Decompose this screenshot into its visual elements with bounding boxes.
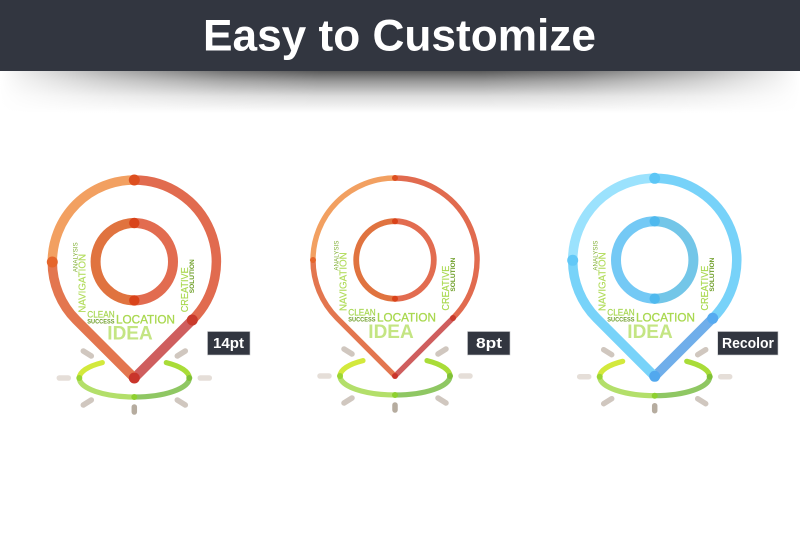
word cloud: SUCCESS — [87, 319, 114, 325]
badge: 8pt — [468, 332, 510, 355]
word cloud: LOCATION — [377, 312, 436, 325]
word cloud — [593, 241, 716, 343]
word cloud: LOCATION — [636, 312, 695, 325]
badge: 14pt: 14pt — [213, 336, 244, 352]
word cloud: SOLUTION — [710, 258, 716, 292]
ground ring — [337, 361, 453, 398]
pin outline — [310, 175, 477, 379]
badge: Recolor: Recolor — [722, 336, 774, 352]
pin: 8pt orange — [310, 175, 477, 410]
word cloud — [73, 242, 196, 345]
word cloud: IDEA — [627, 321, 673, 343]
header shadow — [0, 71, 800, 113]
ground ring — [76, 363, 192, 400]
word cloud: CLEAN — [607, 308, 635, 318]
word cloud — [334, 241, 457, 343]
word cloud: ANALYSIS — [593, 241, 599, 271]
title: Easy to Customize — [203, 12, 596, 60]
word cloud: NAVIGATION — [78, 254, 88, 313]
word cloud: SUCCESS — [607, 318, 634, 324]
word cloud: NAVIGATION — [338, 252, 350, 311]
word cloud: IDEA — [368, 321, 414, 343]
word cloud: SUCCESS — [348, 318, 376, 324]
header bar — [0, 0, 800, 71]
light rays — [580, 350, 730, 411]
inner ring — [616, 216, 693, 304]
word cloud: CLEAN — [348, 308, 376, 318]
word cloud: SOLUTION — [451, 258, 457, 292]
light rays — [59, 351, 209, 412]
pin outline — [567, 173, 737, 382]
word cloud: LOCATION — [116, 313, 175, 326]
word cloud: IDEA — [107, 323, 153, 345]
inner ring — [356, 218, 434, 302]
word cloud: CLEAN — [87, 309, 115, 319]
pin outline — [47, 174, 216, 384]
inner ring — [96, 218, 173, 306]
word cloud: CREATIVE — [440, 266, 452, 311]
badge: Recolor — [718, 332, 778, 355]
badge: 8pt: 8pt — [476, 336, 502, 352]
ground ring — [597, 361, 713, 399]
pin: 14pt orange — [47, 174, 216, 412]
word cloud: CREATIVE — [179, 267, 191, 312]
pin: recolored blue — [567, 173, 737, 411]
badge: 14pt — [208, 332, 250, 355]
word cloud: ANALYSIS — [73, 242, 79, 272]
word cloud: NAVIGATION — [598, 252, 608, 311]
word cloud: CREATIVE — [699, 266, 711, 311]
word cloud: SOLUTION — [190, 259, 196, 293]
word cloud: ANALYSIS — [334, 241, 340, 271]
light rays — [320, 349, 470, 410]
